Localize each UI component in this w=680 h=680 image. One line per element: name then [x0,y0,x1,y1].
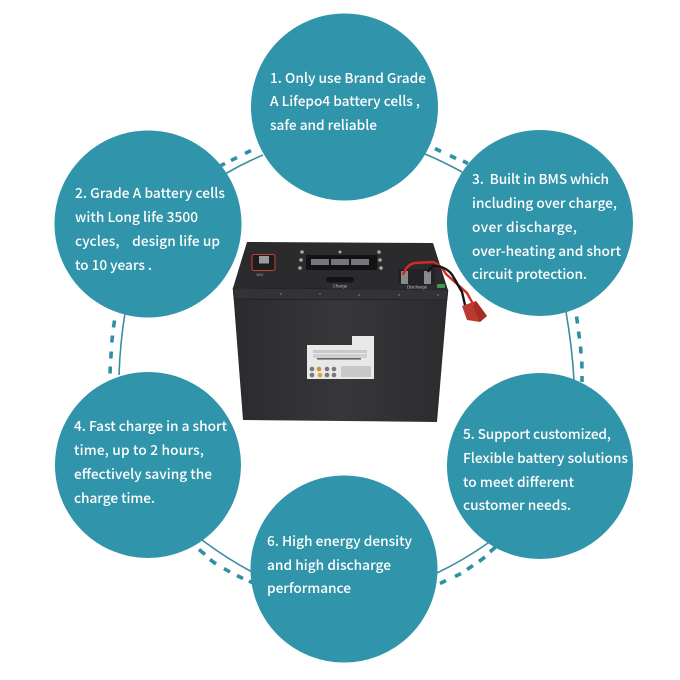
charge port: Charge [333,284,348,288]
circle 5: customized solutions: to meet different [463,471,575,491]
circle 4: fast charge: time, up to 2 hours, [74,439,204,459]
circle 3: built-in BMS: circuit protection. [472,263,587,283]
circle 6: energy density [250,476,438,662]
battery top face [233,242,448,290]
circle 6: energy density: performance [267,577,351,597]
circle 1: brand grade cells [251,14,438,200]
power switch [252,254,275,277]
circle 5: customized solutions: customer needs. [463,494,571,514]
circle 3: built-in BMS: over-heating and short [472,240,622,260]
circle 4: fast charge: 4. Fast charge in a short [74,415,228,435]
power switch: 60V [256,272,264,277]
circle 1: brand grade cells: safe and reliable [270,114,377,134]
cables and connector [403,262,487,322]
circle 3: built-in BMS [447,130,633,316]
circle 3: built-in BMS: including over charge, [472,192,617,212]
circle 2: long life cells: 2. Grade A battery cells [75,182,225,202]
connecting ring: dashed arcs [110,148,582,584]
circle 5: customized solutions: Flexible battery solutions [463,447,628,467]
discharge terminals: Discharge [407,284,428,290]
circle 1: brand grade cells: A Lifepo4 battery cells , [270,90,420,110]
battery lid band [233,288,448,300]
circle 3: built-in BMS: over discharge, [472,216,577,236]
product label [307,336,374,379]
discharge terminals [398,269,445,290]
circle 2: long life cells: with Long life 3500 [75,206,198,226]
circle 6: energy density: and high discharge [267,554,391,574]
circle 6: energy density: 6. High energy density [267,530,413,550]
battery body front [233,290,448,422]
circle 4: fast charge: effectively saving the [74,463,212,483]
circle 2: long life cells [54,130,242,318]
circle 1: brand grade cells: 1. Only use Brand Grade [270,67,426,87]
circle 5: customized solutions: 5. Support customized, [463,423,611,443]
circle 5: customized solutions [447,373,633,559]
circle 2: long life cells: to 10 years . [75,254,152,274]
charge port [326,277,354,288]
circle 4: fast charge: charge time. [74,487,155,507]
handle [298,250,383,270]
circle 2: long life cells: cycles, design life up [75,230,220,250]
battery product illustration [233,242,487,422]
circle 3: built-in BMS: 3. Built in BMS which [472,168,609,188]
circle 4: fast charge [55,372,241,558]
connecting ring: solid arcs [119,154,574,573]
